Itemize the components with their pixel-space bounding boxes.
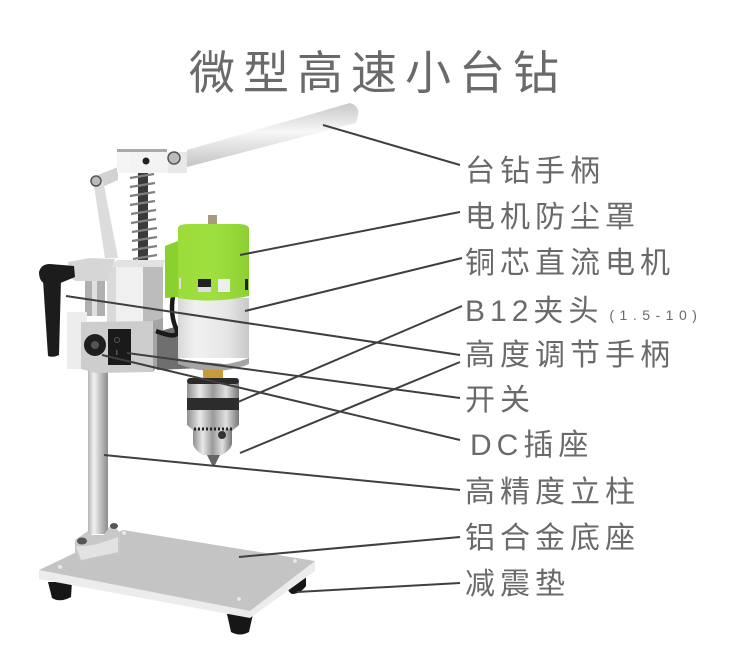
column base clamp — [75, 523, 120, 561]
icon: black locking handle — [39, 264, 75, 357]
slider block — [85, 260, 165, 323]
top clamp — [117, 149, 187, 173]
aluminium base plate — [39, 530, 315, 618]
label: aluminium alloy base: 铝合金底座 — [465, 522, 640, 555]
label: precision column: 高精度立柱 — [465, 476, 640, 509]
label: DC socket: DC插座 — [470, 429, 593, 462]
icon: rubber feet — [48, 574, 306, 634]
motor cable — [156, 296, 177, 335]
label: drill handle: 台钻手柄 — [465, 155, 605, 188]
DC socket — [84, 334, 106, 356]
column — [88, 366, 108, 534]
drill chuck — [187, 370, 239, 465]
title: 微型高速小台钻 — [189, 47, 567, 99]
rocker switch — [108, 329, 131, 365]
label: motor dust cover: 电机防尘罩 — [465, 201, 640, 234]
green dust cover — [165, 224, 249, 301]
leader lines — [66, 125, 462, 592]
copper core DC motor — [178, 298, 249, 371]
spring and screw — [130, 172, 157, 264]
motor bracket — [157, 326, 247, 370]
label: height adjusting handle: 高度调节手柄 — [465, 339, 675, 372]
label: switch: 开关 — [465, 384, 535, 417]
label: B12 chuck: (1.5-10) — [609, 307, 702, 323]
handle rod — [187, 103, 358, 167]
drill press product illustration — [39, 103, 358, 634]
link arm — [91, 167, 118, 258]
label: B12 chuck: B12夹头 — [465, 295, 603, 328]
label: copper core DC motor: 铜芯直流电机 — [465, 247, 675, 280]
label: shock-absorbing pad: 减震垫 — [465, 568, 570, 601]
height clamp — [68, 258, 115, 281]
mount block — [67, 312, 163, 373]
spindle pin — [208, 215, 217, 227]
